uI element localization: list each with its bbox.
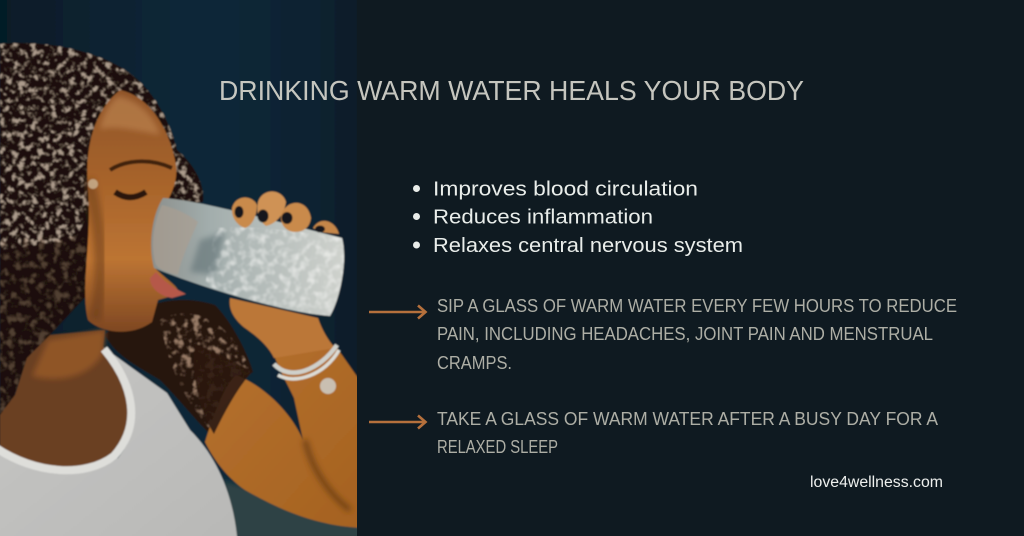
arrow: first tip — [369, 306, 426, 318]
bullet: improves blood circulation: Improves blood circulation — [433, 178, 698, 200]
bullet: reduces inflammation: Reduces inflammation — [433, 206, 653, 228]
glass — [151, 198, 344, 316]
bracelets — [274, 345, 339, 394]
neck and chest — [0, 330, 130, 468]
face — [85, 90, 186, 332]
photo background — [0, 0, 357, 485]
photo: woman drinking from a glass — [0, 0, 370, 536]
bottom-right blurred ground — [222, 480, 370, 536]
website credit: love4wellness.com — [810, 474, 943, 491]
first tip text: SIP A GLASS OF WARM WATER EVERY FEW HOURS TO REDUCE — [437, 296, 957, 316]
arrow: second tip — [369, 416, 426, 428]
second tip text: TAKE A GLASS OF WARM WATER AFTER A BUSY DAY FOR A — [437, 409, 938, 429]
hair — [0, 43, 203, 418]
hair falling over shoulder — [194, 345, 252, 434]
first tip text: PAIN, INCLUDING HEADACHES, JOINT PAIN AND MENSTRUAL — [437, 324, 933, 344]
dark right panel — [357, 0, 1024, 536]
bullet: relaxes nervous system: Relaxes central nervous system — [433, 235, 743, 257]
white tank top — [0, 347, 237, 536]
second tip text — [437, 409, 938, 457]
fingers with dark nails — [232, 192, 339, 234]
hand under glass — [230, 298, 335, 358]
first tip text — [437, 296, 957, 373]
first tip text: CRAMPS. — [437, 353, 512, 373]
curly hair behind neck — [105, 300, 253, 436]
benefits bullet list — [413, 178, 743, 257]
title: DRINKING WARM WATER HEALS YOUR BODY — [219, 75, 804, 106]
forearm and upper arm — [205, 345, 370, 528]
second tip text: RELAXED SLEEP — [437, 437, 558, 457]
